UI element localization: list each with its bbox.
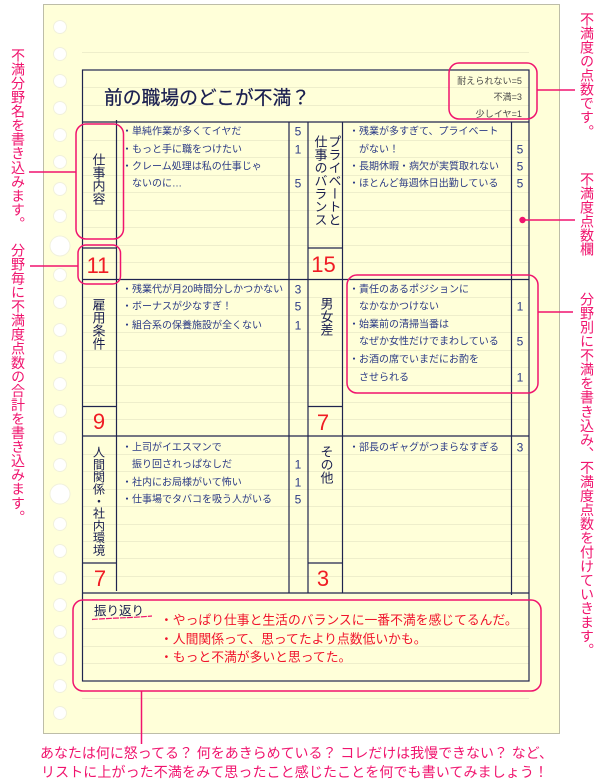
list: work-life balance: 5 xyxy=(517,176,524,190)
callout: items box xyxy=(347,275,573,393)
reflection notes: ・もっと不満が多いと思ってた。 xyxy=(160,650,351,664)
list: gender gap: なぜか女性だけでまわしている xyxy=(359,334,499,348)
category: work-life balance: プライベートと xyxy=(326,135,342,226)
list: work-life balance: がない！ xyxy=(359,142,399,156)
list: employment terms: 1 xyxy=(295,318,302,332)
list: gender gap: なかなかつけない xyxy=(359,300,439,312)
legend: dissatisfaction scores xyxy=(457,75,522,119)
total: work content: 11 xyxy=(87,253,109,278)
note: category names: 不満分野名を書き込みます。 xyxy=(10,48,26,231)
callout: total box xyxy=(30,245,120,284)
note: totals: 分野毎に不満度点数の合計を書き込みます。 xyxy=(10,243,26,524)
list: gender gap xyxy=(349,282,524,384)
list: work content: ・クレーム処理は私の仕事じゃ xyxy=(122,160,262,172)
category: relationships and environment: 人間関係・社内環境 xyxy=(91,446,105,556)
callout: score column marker xyxy=(519,217,575,223)
list: work-life balance: 5 xyxy=(517,160,524,174)
list: work-life balance: ・残業が多すぎて、プライベート xyxy=(349,124,498,138)
list: other xyxy=(349,440,524,454)
list: gender gap: ・お酒の席でいまだにお酌を xyxy=(349,352,479,366)
total: employment terms: 9 xyxy=(93,409,105,434)
title: 前の職場のどこが不満？ xyxy=(104,87,310,108)
list: work content: ないのに… xyxy=(132,178,182,190)
list: relationships and environment: 5 xyxy=(295,492,302,506)
category: work content xyxy=(87,153,109,278)
note: reflection instructions: リストに上がった不満をみて思ったこと感じたことを何でも書いてみましょう！ xyxy=(41,764,548,780)
list: relationships and environment: 振り回されっぱなしだ xyxy=(132,458,232,470)
callout: reflection box xyxy=(73,600,541,744)
list: gender gap: ・始業前の清掃当番は xyxy=(349,318,449,330)
note: items by category: 分野別に不満を書き込み、不満度点数を付けていきます。 xyxy=(579,292,595,657)
list: gender gap: させられる xyxy=(359,372,409,384)
note: reflection instructions xyxy=(40,745,553,780)
list: employment terms: 3 xyxy=(295,282,302,296)
list: work content: 1 xyxy=(295,142,302,156)
legend: dissatisfaction scores: 少しイヤ=1 xyxy=(476,108,522,119)
list: other: ・部長のギャグがつまらなすぎる xyxy=(349,440,499,454)
list: work-life balance xyxy=(349,124,524,190)
total: relationships and environment: 7 xyxy=(94,566,106,591)
legend: dissatisfaction scores: 耐えられない=5 xyxy=(457,75,522,86)
list: work content: 5 xyxy=(295,176,302,190)
category: employment terms: 雇用条件 xyxy=(90,298,106,350)
list: work content: ・単純作業が多くてイヤだ xyxy=(122,124,241,138)
list: gender gap: 1 xyxy=(517,370,524,384)
category: other xyxy=(317,445,334,591)
list: relationships and environment: 1 xyxy=(295,476,302,490)
heading: reflection: 振り返り xyxy=(94,604,144,618)
list: employment terms: 5 xyxy=(295,300,302,314)
table grid xyxy=(82,70,529,681)
list: other: 3 xyxy=(517,440,524,454)
list: employment terms xyxy=(122,282,302,332)
list: employment terms: ・組合系の保養施設が全くない xyxy=(122,318,262,332)
note: score column: 不満度点数欄 xyxy=(579,172,595,257)
note: score meaning: 不満度の点数です。 xyxy=(579,12,595,138)
list: work content xyxy=(122,124,302,190)
list: gender gap: 5 xyxy=(517,334,524,348)
list: work-life balance: ・ほとんど毎週休日出勤している xyxy=(349,176,498,190)
category: employment terms xyxy=(90,298,106,434)
list: employment terms: ・ボーナスが少なすぎ！ xyxy=(122,300,232,312)
list: relationships and environment: 1 xyxy=(295,458,302,472)
reflection notes: ・人間関係って、思ってたより点数低いかも。 xyxy=(160,632,427,646)
total: other: 3 xyxy=(317,566,329,591)
category: work-life balance: 仕事のバランス xyxy=(312,135,328,226)
list: relationships and environment: ・仕事場でタバコを吸う人がいる xyxy=(122,492,272,506)
list: relationships and environment: ・上司がイエスマンで xyxy=(122,440,222,454)
list: relationships and environment xyxy=(122,440,302,506)
list: work-life balance: ・長期休暇・病欠が実質取れない xyxy=(349,160,499,172)
list: work content: 5 xyxy=(295,124,302,138)
total: work-life balance: 15 xyxy=(311,252,336,277)
category: gender gap: 男女差 xyxy=(318,297,334,337)
list: employment terms: ・残業代が月20時間分しかつかない xyxy=(122,282,283,296)
legend: dissatisfaction scores: 不満=3 xyxy=(493,92,522,102)
list: gender gap: 1 xyxy=(517,300,524,314)
category: gender gap xyxy=(317,297,334,435)
list: work content: ・もっと手に職をつけたい xyxy=(122,142,242,156)
category: work-life balance xyxy=(311,135,342,277)
list: work-life balance: 5 xyxy=(517,142,524,156)
callout: category name box xyxy=(29,124,124,239)
reflection notes xyxy=(160,612,518,664)
category: other: その他 xyxy=(318,445,334,485)
reflection notes: ・やっぱり仕事と生活のバランスに一番不満を感じてるんだ。 xyxy=(160,612,518,628)
category: work content: 仕事内容 xyxy=(90,153,106,206)
list: gender gap: ・責任のあるポジションに xyxy=(349,282,469,296)
total: gender gap: 7 xyxy=(317,410,329,435)
list: relationships and environment: ・社内にお局様がいて怖い xyxy=(122,476,242,488)
note: reflection instructions: あなたは何に怒ってる？ 何をあきらめている？ コレだけは我慢できない？ など、 xyxy=(40,745,553,761)
callout: score legend box xyxy=(449,63,575,119)
